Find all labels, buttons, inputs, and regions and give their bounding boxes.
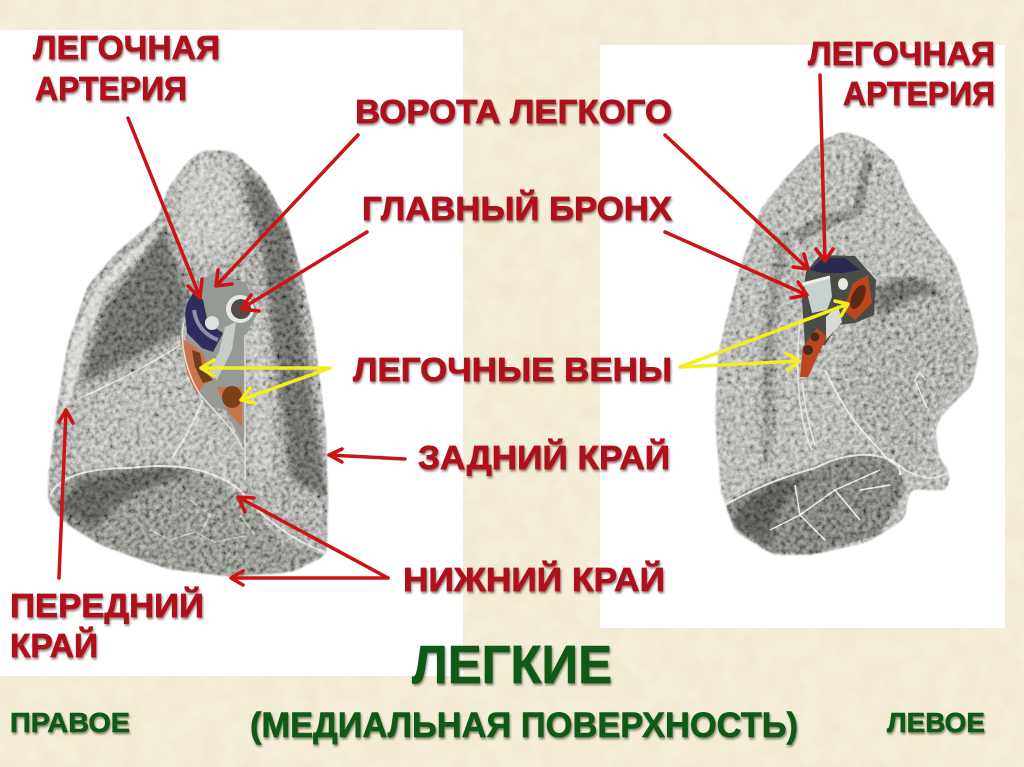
label: left pulmonary artery: ЛЕГОЧНАЯ <box>808 35 995 72</box>
lower lobe <box>725 452 905 555</box>
arrow: right upper vein <box>201 360 330 376</box>
right lung illustration <box>40 140 340 585</box>
label: left lung: ЛЕВОЕ <box>887 707 985 738</box>
panel: left white backing <box>0 30 463 676</box>
label: right lung: ПРАВОЕ <box>10 707 130 738</box>
arrow: right pulmonary artery <box>128 118 202 298</box>
arrows: yellow <box>201 301 848 403</box>
arrow: posterior border <box>329 449 405 462</box>
arrow: right hilum <box>216 135 358 286</box>
label: right pulmonary artery: АРТЕРИЯ <box>35 70 187 107</box>
label: pulmonary veins: ЛЕГОЧНЫЕ ВЕНЫ <box>353 351 672 388</box>
cardiac impression <box>835 277 970 470</box>
arrow: lower border to fold <box>238 497 388 578</box>
subtitle: (МЕДИАЛЬНАЯ ПОВЕРХНОСТЬ) <box>250 706 798 745</box>
label: left pulmonary artery <box>808 35 995 112</box>
vertical fold <box>762 232 793 465</box>
label: main bronchus: ГЛАВНЫЙ БРОНХ <box>362 189 672 227</box>
arrow: lower border to base <box>231 571 388 585</box>
label: posterior border: ЗАДНИЙ КРАЙ <box>418 438 670 476</box>
label: anterior border: КРАЙ <box>10 626 98 664</box>
lower lobe <box>50 464 325 578</box>
arrows: red <box>59 75 833 585</box>
label: anterior border: ПЕРЕДНИЙ <box>10 586 204 624</box>
label: left pulmonary artery: АРТЕРИЯ <box>843 75 995 112</box>
arrow: left pulmonary artery <box>816 75 833 261</box>
left lung hilum <box>798 255 876 450</box>
label: anterior border <box>10 586 204 664</box>
right lung hilum <box>180 272 258 480</box>
left lung illustration <box>710 125 985 560</box>
arrow: left lower vein <box>680 353 799 370</box>
arrow: anterior border <box>59 410 73 578</box>
posterior shaded band <box>240 165 328 500</box>
arrow: right lower vein <box>241 368 330 403</box>
arrow: left upper vein <box>680 301 848 367</box>
arrow: left hilum <box>665 135 808 269</box>
label: right pulmonary artery <box>33 29 220 107</box>
costal ridge <box>78 225 190 385</box>
label: hilum: ВОРОТА ЛЕГКОГО <box>355 93 672 130</box>
apex fold <box>793 152 874 245</box>
arrow: right main bronchus <box>241 232 367 311</box>
label: right pulmonary artery: ЛЕГОЧНАЯ <box>33 29 220 66</box>
title: ЛЕГКИЕ <box>412 635 612 695</box>
arrow: left main bronchus <box>665 232 807 298</box>
label: lower border: НИЖНИЙ КРАЙ <box>403 560 665 598</box>
panel: right white backing <box>600 45 1005 628</box>
